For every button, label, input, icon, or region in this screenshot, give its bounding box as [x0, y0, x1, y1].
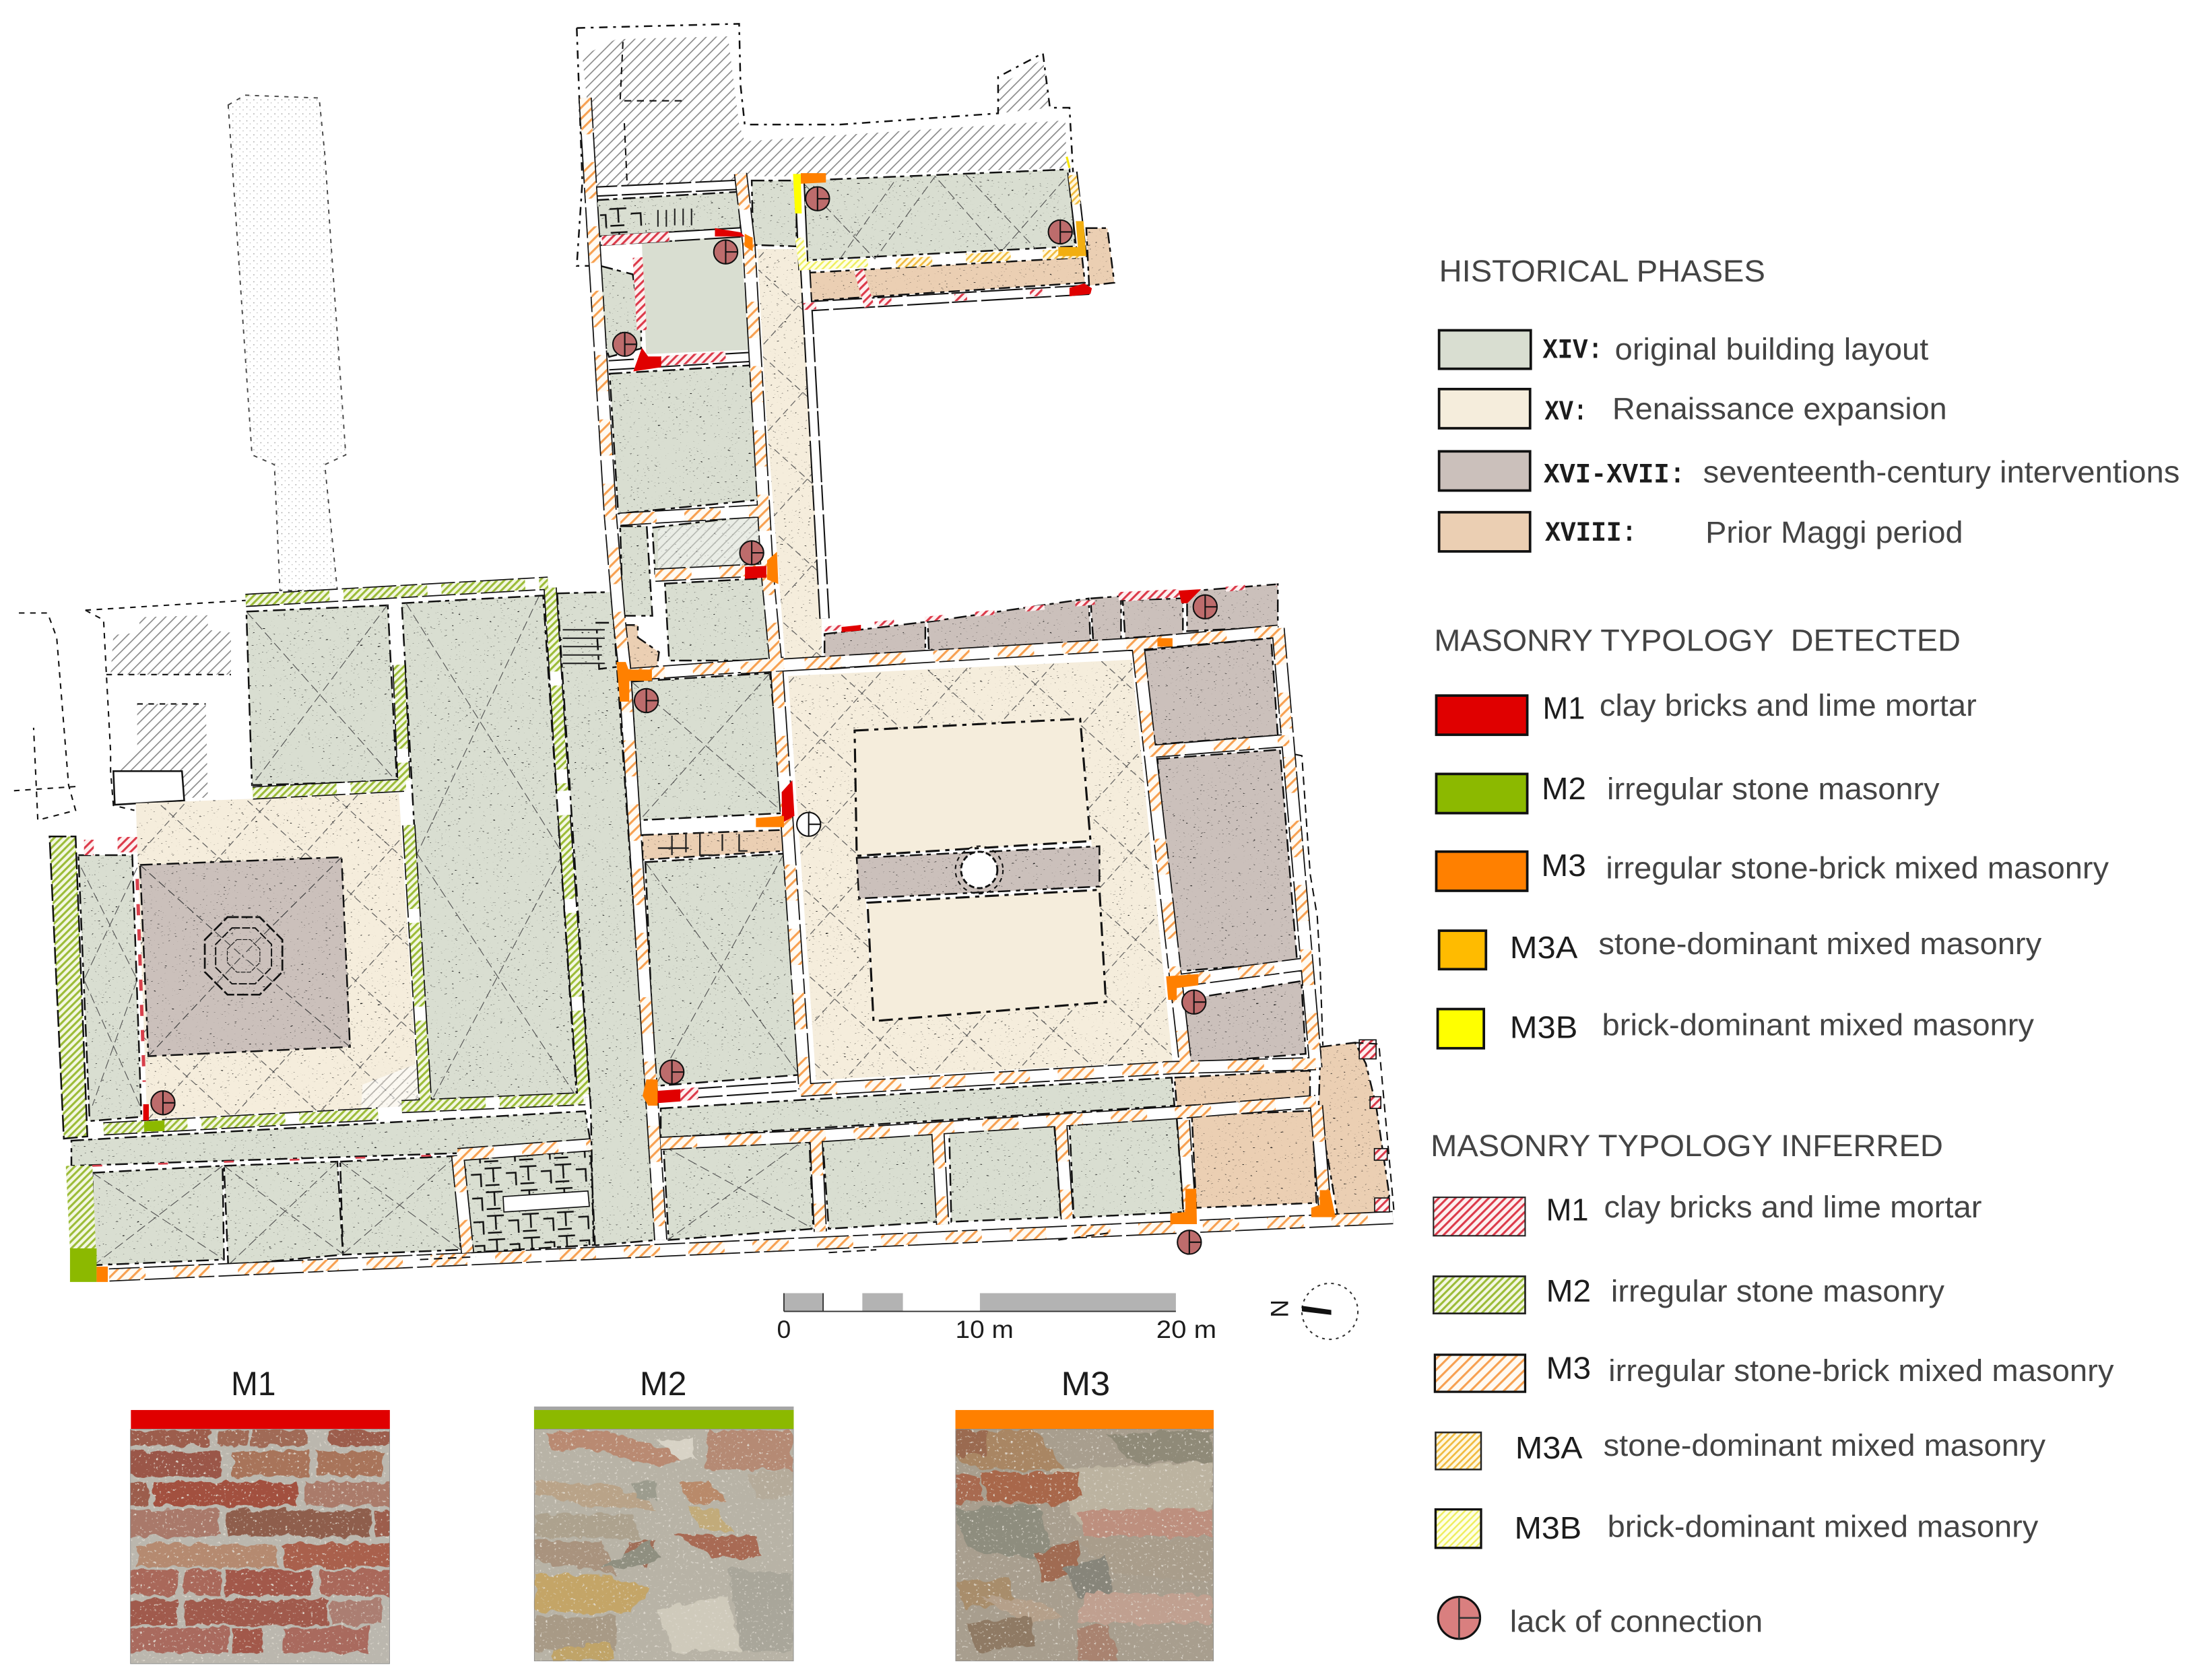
- item M3A: stone-dominant mixed masonry: [1604, 1428, 2045, 1463]
- photo panel M2: [533, 1372, 793, 1662]
- item M2: irregular stone masonry: [1607, 772, 1940, 806]
- scale bar: [777, 1293, 1216, 1343]
- hatched neighbouring buildings west: [14, 601, 246, 820]
- rooms: XVIII Prior Maggi period: [624, 228, 1389, 1217]
- item M3: irregular stone-brick mixed masonry: [1608, 1353, 2114, 1388]
- item M3: M3: [1541, 848, 1586, 883]
- item M3B: [1438, 1008, 2034, 1048]
- heading: HISTORICAL PHASES: [1439, 254, 1765, 288]
- walls: inferred M3A and M3B: [799, 157, 1079, 270]
- legend: historical phases: [1439, 254, 2180, 551]
- mixed masonry photo M3: [955, 1429, 1214, 1662]
- item M2: irregular stone masonry: [1611, 1274, 1944, 1308]
- item M1: M1: [1542, 691, 1585, 726]
- item M3: M3: [1546, 1350, 1591, 1385]
- item XIV: XIV:: [1542, 335, 1603, 367]
- title M3: M3: [1061, 1365, 1110, 1403]
- rooms: XVI-XVII seventeenth-century interventions: [140, 584, 1306, 1064]
- rooms: XV Renaissance expansion: [136, 249, 1173, 1119]
- item M2: [1433, 1273, 1944, 1314]
- item M3B: M3B: [1510, 1009, 1577, 1044]
- item M3: [1435, 1350, 2114, 1392]
- brick masonry photo M1: [119, 1429, 399, 1667]
- walls: inferred plain: [592, 172, 1089, 1093]
- item lack of connection: [1438, 1597, 1763, 1639]
- north arrow: [1266, 1283, 1358, 1339]
- detected masonry M1 (red): [143, 228, 1201, 1120]
- item XV: [1439, 389, 1947, 428]
- walls: inferred M2 irregular stone masonry: [50, 583, 585, 1250]
- heading: MASONRY TYPOLOGY INFERRED: [1431, 1129, 1943, 1163]
- detected masonry M2 (green): [70, 1120, 164, 1282]
- north arrow: N: [1266, 1300, 1294, 1318]
- item M1: [1433, 1190, 1981, 1236]
- item XV: Renaissance expansion: [1612, 391, 1947, 426]
- vault lines: [81, 174, 1070, 1265]
- item XIV: original building layout: [1615, 332, 1929, 366]
- item M1: clay bricks and lime mortar: [1600, 688, 1977, 723]
- item lack of connection: lack of connection: [1510, 1604, 1763, 1638]
- floor plan: [14, 24, 1394, 1282]
- heading: MASONRY TYPOLOGY DETECTED: [1434, 623, 1961, 657]
- colour bar M2: [534, 1407, 793, 1429]
- item M3B: [1435, 1510, 2038, 1548]
- item XV: XV:: [1545, 397, 1587, 428]
- east dashed outline: [420, 754, 1394, 1260]
- lack of connection markers: [151, 187, 1217, 1254]
- item M3A: M3A: [1510, 930, 1578, 965]
- item M3B: brick-dominant mixed masonry: [1608, 1510, 2038, 1544]
- item M3A: M3A: [1515, 1430, 1583, 1465]
- item M3A: [1435, 1428, 2045, 1469]
- item M1: M1: [1546, 1192, 1589, 1227]
- item M2: M2: [1542, 771, 1586, 806]
- item M3: irregular stone-brick mixed masonry: [1606, 851, 2109, 885]
- scale bar: 20 m: [1156, 1315, 1216, 1343]
- item M3B: M3B: [1514, 1510, 1581, 1545]
- stone masonry photo M2: [533, 1429, 793, 1662]
- detected masonry M3 (orange): [96, 173, 1336, 1282]
- photo panel M3: [955, 1372, 1214, 1662]
- item M2: M2: [1546, 1273, 1591, 1308]
- title M1: M1: [231, 1365, 275, 1403]
- scale bar: 0: [777, 1315, 791, 1343]
- hatch over small room: [658, 516, 764, 572]
- colour bar M3: [956, 1410, 1214, 1429]
- colour bar M1: [131, 1410, 390, 1429]
- detected masonry M3B (yellow): [793, 174, 801, 213]
- item XIV: [1439, 331, 1929, 369]
- item M3: [1436, 848, 2109, 891]
- hatched neighbouring buildings north: [577, 24, 1075, 266]
- item XVI-XVII: [1439, 451, 2180, 492]
- title M2: M2: [640, 1365, 686, 1403]
- detected masonry M3A (gold): [1058, 221, 1086, 256]
- walls: inferred M3 irregular stone-brick mixed masonry: [109, 98, 1393, 1275]
- item M1: clay bricks and lime mortar: [1604, 1190, 1981, 1224]
- item M1: [1436, 688, 1977, 735]
- item M3B: brick-dominant mixed masonry: [1602, 1008, 2034, 1042]
- item XVI-XVII: seventeenth-century interventions: [1703, 455, 2180, 490]
- item M3A: [1439, 927, 2041, 969]
- item M2: [1436, 771, 1940, 813]
- photo panel M1: [130, 1372, 390, 1665]
- rooms: XIV original building layout: [71, 170, 1183, 1265]
- item XVIII: [1439, 512, 1963, 551]
- stair block: [463, 201, 748, 1252]
- legend: masonry typology detected: [1434, 623, 2109, 1048]
- item XVIII: Prior Maggi period: [1705, 515, 1963, 549]
- item XVI-XVII: XVI-XVII:: [1544, 460, 1685, 492]
- scale bar: 10 m: [956, 1315, 1014, 1343]
- legend: masonry typology inferred: [1431, 1129, 2114, 1639]
- item M3A: stone-dominant mixed masonry: [1598, 927, 2041, 961]
- dotted tower outline: [228, 95, 346, 591]
- item XVIII: XVIII:: [1545, 518, 1637, 549]
- walls: inferred M1 clay bricks: [84, 236, 1389, 1212]
